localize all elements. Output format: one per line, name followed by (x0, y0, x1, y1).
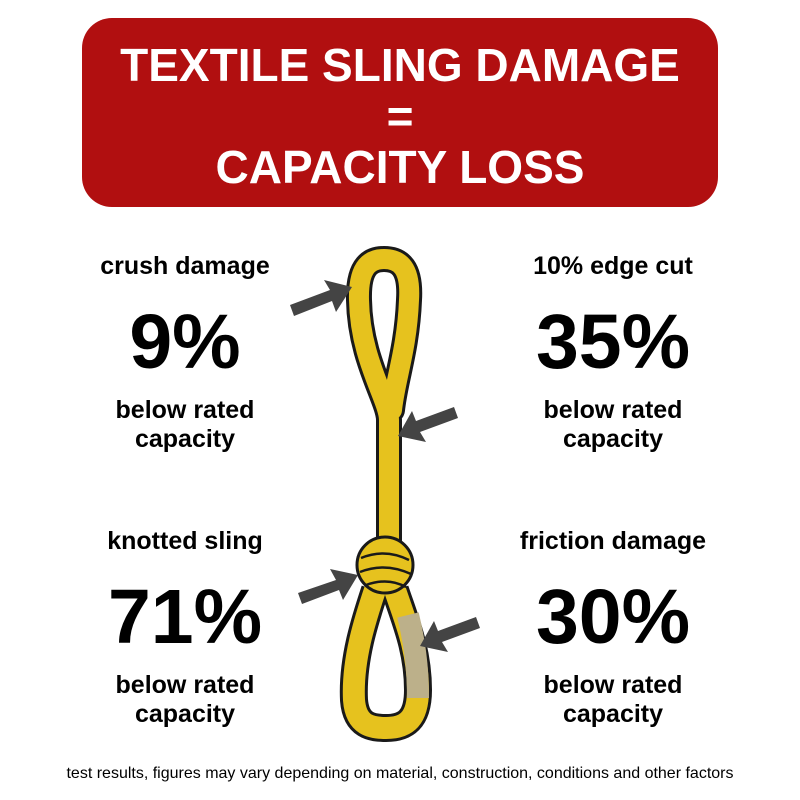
title: CAPACITY LOSS (216, 141, 584, 193)
arrow: crush (290, 280, 352, 316)
panel: knotted sling: 71% (108, 574, 262, 660)
panel: friction damage (520, 527, 706, 728)
panel: friction damage: below rated (544, 671, 682, 699)
panel: knotted sling: below rated (116, 671, 254, 699)
panel: friction damage: friction damage (520, 527, 706, 555)
panel: knotted sling: capacity (135, 700, 235, 728)
panel: edge cut (533, 252, 693, 453)
panel: crush damage: below rated (116, 396, 254, 424)
panel: friction damage: capacity (563, 700, 663, 728)
arrow: edge cut (398, 407, 458, 442)
top loop (359, 259, 409, 540)
title (82, 18, 718, 207)
panel: knotted sling: knotted sling (107, 527, 263, 555)
panel: edge cut: below rated (544, 396, 682, 424)
bottom loop (354, 590, 418, 728)
panel: crush damage (100, 252, 270, 453)
panel: crush damage: capacity (135, 425, 235, 453)
panel: friction damage: 30% (536, 574, 690, 660)
panel: edge cut: 35% (536, 299, 690, 385)
footnote: test results, figures may vary depending on material, construction, conditions and other factors (66, 765, 734, 782)
title: TEXTILE SLING DAMAGE (120, 39, 680, 91)
panel: edge cut: 10% edge cut (533, 252, 693, 280)
panel: edge cut: capacity (563, 425, 663, 453)
panel: crush damage: crush damage (100, 252, 270, 280)
panel: crush damage: 9% (129, 299, 241, 385)
panel: knotted sling (107, 527, 263, 728)
arrow: knot (298, 569, 358, 604)
knot (357, 537, 413, 593)
title: = (387, 90, 413, 142)
arrow: friction (420, 617, 480, 652)
